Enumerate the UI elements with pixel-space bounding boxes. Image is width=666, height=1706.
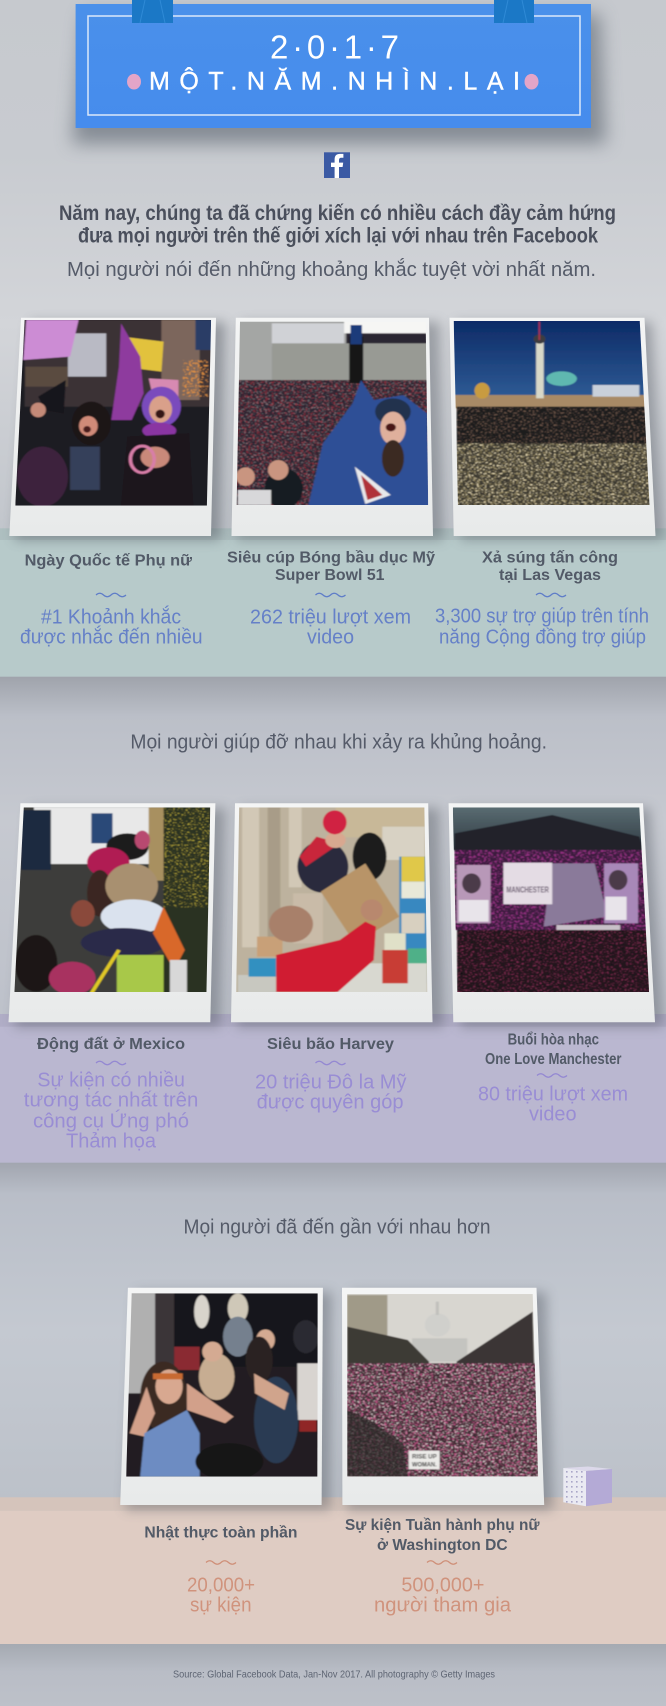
pink dot right <box>524 74 538 89</box>
photo: one love manchester: MANCHESTER <box>506 886 549 894</box>
stat <box>374 1575 512 1617</box>
photo: solar eclipse <box>123 1292 321 1480</box>
photo: super bowl crowd <box>234 320 429 508</box>
stat <box>435 606 649 648</box>
stat: sự kiện <box>190 1595 252 1617</box>
wave <box>96 1061 126 1065</box>
label <box>482 550 618 584</box>
panel: crisis <box>0 803 666 1163</box>
stat: #1 Khoảnh khắc <box>41 605 181 628</box>
wave <box>536 593 566 597</box>
label: Super Bowl 51 <box>275 567 385 584</box>
intro heading: đưa mọi người trên thế giới xích lại với nhau trên Facebook <box>78 225 598 248</box>
label: Nhật thực toàn phần <box>144 1524 297 1541</box>
photo: women's day march <box>13 318 212 507</box>
section heading: moments: Mọi người nói đến những khoảng khắc tuyệt vời nhất năm. <box>67 258 596 281</box>
label: Sự kiện Tuần hành phụ nữ <box>345 1517 540 1534</box>
stat: 20 triệu Đô la Mỹ <box>255 1072 406 1094</box>
card: super bowl <box>227 318 444 648</box>
photo: women's march: WOMAN. <box>412 1461 437 1468</box>
title banner <box>72 0 606 144</box>
wave <box>206 1561 236 1564</box>
label: Siêu bão Harvey <box>267 1036 394 1053</box>
panel: together <box>0 1288 666 1644</box>
stat: tương tác nhất trên <box>24 1090 198 1112</box>
label: Siêu cúp Bóng bầu dục Mỹ <box>227 550 435 567</box>
panel: moments <box>0 318 666 677</box>
shelf <box>0 1497 666 1644</box>
card: las vegas <box>435 318 664 648</box>
label <box>227 550 435 584</box>
stat: 80 triệu lượt xem <box>478 1084 628 1106</box>
clip left <box>132 0 173 23</box>
stat: 500,000+ <box>401 1575 484 1597</box>
label: One Love Manchester <box>485 1051 622 1068</box>
stat: được quyên góp <box>257 1092 404 1114</box>
shelf <box>0 528 666 677</box>
wave <box>537 1074 567 1077</box>
banner subtitle: MỘT.NĂM.NHÌN.LẠI <box>149 66 520 95</box>
shelf <box>0 1014 666 1163</box>
section heading: together: Mọi người đã đến gần với nhau hơn <box>184 1215 490 1238</box>
stat: Thảm họa <box>66 1130 157 1152</box>
stat: năng Cộng đồng trợ giúp <box>439 626 646 648</box>
wave <box>316 1061 346 1065</box>
icon: facebook <box>324 152 350 178</box>
photo: mexico earthquake <box>13 807 212 995</box>
source note: Source: Global Facebook Data, Jan-Nov 2017. All photography © Getty Images <box>173 1668 495 1680</box>
stat <box>20 605 203 648</box>
stat <box>250 606 411 648</box>
intro heading <box>59 202 616 248</box>
label <box>345 1517 540 1554</box>
wave <box>316 593 346 597</box>
label: Buổi hòa nhạc <box>508 1030 599 1048</box>
card: manchester <box>449 803 664 1126</box>
label: Xả súng tấn công <box>482 550 618 567</box>
stat: Sự kiện có nhiều <box>37 1070 185 1092</box>
photo: las vegas vigil <box>450 320 654 507</box>
photo: women's march <box>346 1293 539 1477</box>
photo: women's march: RISE UP <box>412 1452 437 1460</box>
label: Ngày Quốc tế Phụ nữ <box>25 553 192 570</box>
pink dot left <box>127 74 141 89</box>
stat <box>187 1575 255 1617</box>
stat: video <box>307 626 354 648</box>
stat <box>255 1072 406 1114</box>
wave <box>96 593 126 597</box>
stat: 3,300 sự trợ giúp trên tính <box>435 606 649 628</box>
label: tại Las Vegas <box>499 567 601 584</box>
stat <box>478 1084 628 1126</box>
label <box>485 1030 622 1068</box>
stat: 20,000+ <box>187 1575 255 1597</box>
card: mexico <box>8 803 226 1152</box>
stat: được nhắc đến nhiều <box>20 625 203 648</box>
section heading: crisis: Mọi người giúp đỡ nhau khi xảy ra khủng hoảng. <box>130 730 547 753</box>
stat: video <box>529 1104 576 1126</box>
stat: người tham gia <box>374 1595 512 1617</box>
card: women's march <box>342 1288 553 1617</box>
label: Động đất ở Mexico <box>37 1036 185 1053</box>
card: women's day <box>9 318 226 648</box>
card: harvey <box>231 803 444 1114</box>
photo: one love manchester <box>450 807 654 993</box>
stat: 262 triệu lượt xem <box>250 606 411 628</box>
icon: cube <box>563 1466 612 1506</box>
year: 2·0·1·7 <box>270 28 399 66</box>
stat <box>24 1070 198 1152</box>
stat: công cụ Ứng phó <box>33 1109 189 1132</box>
label: ở Washington DC <box>377 1537 508 1554</box>
photo: hurricane harvey <box>234 807 429 993</box>
card: eclipse <box>120 1288 332 1617</box>
wave <box>427 1561 457 1564</box>
clip right <box>494 0 534 23</box>
